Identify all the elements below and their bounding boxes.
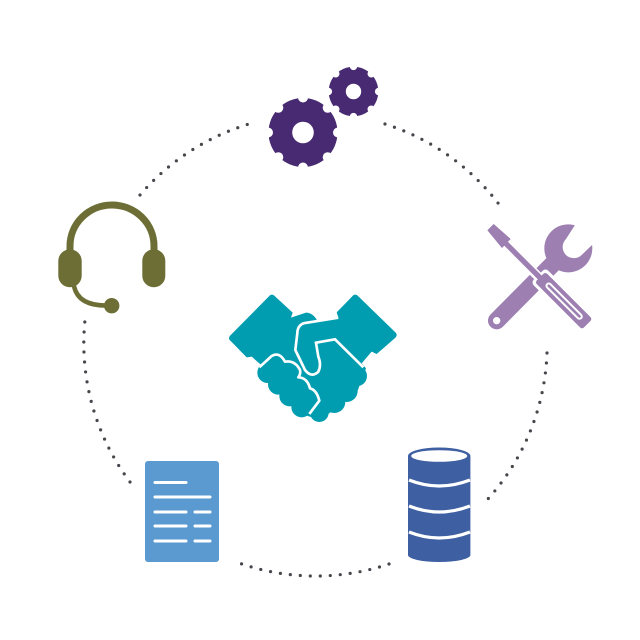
icon: gears: [263, 62, 382, 172]
icon: wrench and screwdriver: [488, 224, 600, 333]
wrench: [493, 224, 600, 324]
icon: large gear: [263, 92, 343, 172]
fist outline: [259, 355, 319, 414]
icon: document: [145, 461, 219, 562]
icon: small gear: [324, 62, 382, 120]
dotted ring: [84, 124, 547, 576]
icon: handshake: [229, 295, 397, 422]
thumb outline: [295, 318, 363, 375]
screwdriver: [488, 225, 596, 333]
icon: headset: [58, 205, 165, 313]
icon: database: [408, 448, 470, 562]
